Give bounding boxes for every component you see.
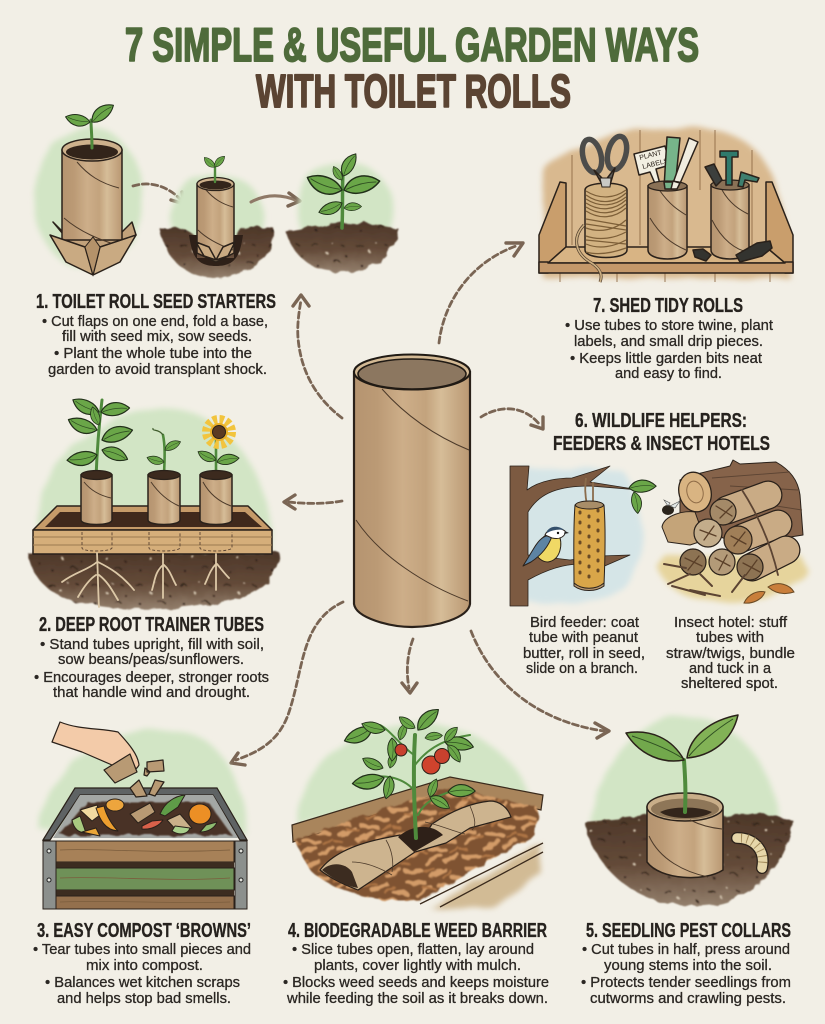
heading 6: 6. WILDLIFE HELPERS: — [575, 410, 747, 432]
heading 4: 4. BIODEGRADABLE WEED BARRIER — [288, 920, 547, 942]
illustration: seed starter tube with flaps — [34, 100, 142, 275]
text block 5: • Protects tender seedlings from — [581, 975, 791, 991]
title: WITH TOILET ROLLS — [256, 65, 571, 117]
caption: bird feeder: tube with peanut — [529, 630, 638, 646]
illustration: shelf with tubes — [539, 128, 793, 282]
arrow: to root trainers — [284, 495, 342, 509]
icon: blue tit — [523, 527, 569, 566]
text block 1 — [42, 314, 268, 378]
panel 4: weed barrier — [283, 704, 549, 1007]
title — [125, 18, 699, 117]
panel 3: compost — [33, 722, 251, 1007]
tomato plant — [342, 704, 475, 838]
illustration: established plant — [286, 151, 398, 272]
text block 4: • Blocks weed seeds and keeps moisture — [283, 975, 549, 991]
tube: drip pieces — [693, 151, 772, 262]
caption: bird feeder: Bird feeder: coat — [530, 615, 639, 631]
panel 1: seed starters — [34, 100, 398, 378]
text block 4: while feeding the soil as it breaks down. — [286, 991, 548, 1007]
illustration: seedling collar and grub — [584, 715, 793, 906]
panel 2: deep root trainer tubes — [28, 395, 280, 701]
text block 5 — [581, 942, 791, 1007]
caption: bird feeder — [523, 615, 645, 677]
arrow: to pest collars — [471, 631, 609, 738]
arrow: growth step — [251, 193, 300, 206]
arrow: to wildlife helpers — [481, 409, 543, 429]
text block 3 — [33, 942, 251, 1007]
text block 3: mix into compost. — [86, 958, 203, 974]
central toilet roll — [354, 354, 470, 627]
tubes stack — [727, 490, 786, 575]
heading 7: 7. SHED TIDY ROLLS — [593, 295, 743, 317]
tube with sunflower — [196, 420, 240, 524]
text block 5: • Cut tubes in half, press around — [582, 942, 790, 958]
icon: hand tearing tube — [52, 722, 164, 797]
caption: insect hotel: tubes with — [696, 630, 764, 646]
icon: bee — [662, 500, 680, 515]
text block 1: • Cut flaps on one end, fold a base, — [42, 314, 268, 330]
text block 2 — [34, 637, 269, 701]
text block 2: • Encourages deeper, stronger roots — [34, 670, 269, 686]
panel 5: pest collars — [581, 715, 793, 1007]
tube barrier — [320, 801, 511, 890]
illustration: compost bin — [40, 722, 247, 909]
text block 7: • Use tubes to store twine, plant — [565, 318, 773, 334]
text block 3: • Balances wet kitchen scraps — [45, 975, 240, 991]
text block 7 — [565, 318, 773, 382]
caption: insect hotel: and tuck in a — [689, 661, 772, 677]
caption: insect hotel: Insect hotel: stuff — [674, 615, 788, 631]
illustration: tube planted in soil — [160, 154, 274, 278]
bin front — [56, 841, 234, 862]
heading 3: 3. EASY COMPOST ‘BROWNS’ — [37, 920, 251, 942]
heading 6: FEEDERS & INSECT HOTELS — [553, 433, 770, 455]
arrow: planting step — [133, 184, 184, 204]
text block 3: and helps stop bad smells. — [57, 991, 231, 1007]
text block 4: • Slice tubes open, flatten, lay around — [292, 942, 534, 958]
arrow: to shed tidy rolls — [439, 243, 523, 343]
icon: scissors — [579, 134, 630, 187]
caption: bird feeder: butter, roll in seed, — [523, 646, 645, 662]
text block 4 — [283, 942, 549, 1007]
tube: plant labels: LABELS — [642, 158, 669, 171]
text block 2: that handle wind and drought. — [53, 685, 250, 701]
illustration: bird feeder — [510, 466, 656, 606]
panel 7: shed tidy rolls — [539, 128, 793, 382]
text block 1: fill with seed mix, sow seeds. — [62, 329, 252, 345]
text block 5: cutworms and crawling pests. — [590, 991, 786, 1007]
heading 1: 1. TOILET ROLL SEED STARTERS — [36, 291, 276, 313]
caption: insect hotel: straw/twigs, bundle — [666, 646, 795, 662]
text block 4: plants, cover lightly with mulch. — [314, 958, 521, 974]
text block 7: • Keeps little garden bits neat — [570, 351, 762, 367]
text block 5: young stems into the soil. — [604, 958, 772, 974]
illustration: insect hotel — [656, 460, 808, 603]
arrow: to compost — [231, 602, 343, 765]
panel 6: wildlife helpers — [510, 410, 808, 692]
heading 6 — [553, 410, 770, 455]
illustration: planter with tubes and roots — [28, 395, 280, 609]
text block 2: • Stand tubes upright, fill with soil, — [40, 637, 264, 653]
icon: grub — [737, 838, 763, 868]
arrow: to weed barrier — [402, 639, 417, 693]
text block 7: and easy to find. — [615, 366, 722, 382]
text block 1: • Plant the whole tube into the — [54, 346, 252, 362]
scraps — [72, 795, 217, 836]
heading 2: 2. DEEP ROOT TRAINER TUBES — [39, 614, 264, 636]
text block 1: garden to avoid transplant shock. — [48, 362, 267, 378]
caption: insect hotel: sheltered spot. — [681, 676, 778, 692]
illustration: mulched bed with tube and tomato — [292, 704, 543, 907]
icon: twine spool — [577, 183, 627, 282]
arrow: to seed starters — [293, 295, 342, 418]
tube: plant labels — [634, 137, 698, 259]
text block 2: sow beans/peas/sunflowers. — [58, 652, 244, 668]
tube: plant labels: PLANT — [639, 150, 663, 162]
text block 7: labels, and small drip pieces. — [574, 334, 763, 350]
tube with bean plant — [66, 395, 134, 524]
text block 3: • Tear tubes into small pieces and — [33, 942, 251, 958]
tube with pea plant — [146, 428, 182, 524]
caption: bird feeder: slide on a branch. — [526, 661, 638, 677]
caption: insect hotel — [666, 615, 795, 692]
